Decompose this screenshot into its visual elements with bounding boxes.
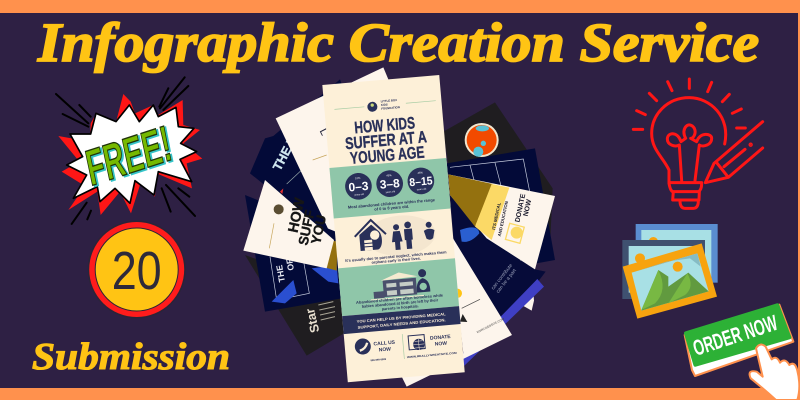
free text bbox=[81, 114, 178, 198]
card: navy the: OF bbox=[284, 258, 296, 271]
navy band text bbox=[357, 312, 447, 330]
card: cream how suffer bbox=[243, 180, 334, 268]
call us block bbox=[354, 336, 397, 363]
card: navy top left: THE W bbox=[270, 130, 302, 173]
donate block: WWW.REALLYGREATSITE.COM bbox=[407, 351, 458, 359]
age circles: 0–3 bbox=[348, 179, 369, 194]
icon: baby bbox=[423, 221, 435, 240]
base bbox=[669, 183, 702, 208]
icon: building bbox=[369, 271, 424, 300]
free text: FREE! bbox=[83, 116, 178, 198]
card: navy the: THE bbox=[274, 264, 287, 283]
infographic fan bbox=[243, 67, 555, 387]
donate block: DONATE bbox=[430, 334, 452, 342]
call us block: 999-999-9999 bbox=[371, 358, 387, 362]
navy band text: YOU CAN HELP US BY PROVIDING MEDICAL bbox=[357, 312, 447, 324]
age circles: 45% bbox=[386, 173, 392, 178]
faint map blob bbox=[364, 213, 437, 258]
cream section text: orphans early in their lives. bbox=[371, 257, 421, 265]
main heading: SUFFER AT A bbox=[344, 127, 428, 153]
call us block: CALL US bbox=[373, 340, 396, 348]
card: black start bbox=[245, 255, 344, 356]
card: gold and cream: ITS MEDICAL bbox=[491, 202, 502, 230]
card: cream lower: WWW.WEBSITE.COM bbox=[476, 317, 505, 334]
title: Infographic Creation Service bbox=[37, 12, 759, 73]
badge: 20: 20 bbox=[112, 241, 162, 301]
card: cream how suffer: YOU bbox=[308, 213, 329, 246]
donate block bbox=[405, 332, 458, 359]
card: cream top left: L bbox=[317, 127, 330, 138]
card: black start: Star bbox=[303, 307, 322, 334]
card: gold and cream: AND EDUCATION bbox=[497, 201, 509, 237]
icon: photos bbox=[622, 224, 718, 319]
free text: FREE! bbox=[81, 115, 176, 197]
main heading: YOUNG AGE bbox=[349, 143, 425, 168]
card: gold and cream bbox=[448, 174, 555, 269]
icon: mother bbox=[415, 269, 430, 293]
card: navy top left bbox=[250, 79, 345, 242]
icon: light bulb and pencil bbox=[633, 79, 763, 208]
rays bbox=[633, 79, 745, 129]
age circles: 10% bbox=[355, 176, 361, 180]
card: blue sliver bbox=[450, 351, 480, 370]
icon: couple bbox=[390, 221, 414, 250]
submission label: Submission bbox=[32, 336, 230, 378]
call us block: NOW bbox=[379, 346, 391, 353]
icon: pointing hand bbox=[750, 345, 799, 400]
card: navy with ship: can be a part bbox=[495, 267, 518, 295]
card: cream how suffer: HOW bbox=[286, 196, 309, 234]
logo: LITTLE BOX bbox=[380, 98, 397, 103]
navy band bbox=[342, 306, 461, 334]
age circles: 3–8 bbox=[379, 176, 401, 192]
age circles: years old bbox=[354, 193, 365, 197]
card: cream how suffer: SUFF bbox=[296, 209, 318, 247]
age circles bbox=[344, 167, 435, 201]
burst rays bbox=[56, 77, 195, 224]
main infographic card bbox=[322, 75, 465, 382]
white burst bbox=[67, 105, 197, 203]
age circles: years old bbox=[386, 190, 396, 194]
age circles: 45% bbox=[417, 170, 424, 175]
main heading bbox=[343, 112, 429, 168]
card: gold sliver bbox=[325, 240, 337, 271]
card: cream lower bbox=[402, 233, 512, 387]
logo: FOUNDATION bbox=[381, 105, 400, 111]
card: navy the bbox=[245, 195, 342, 312]
filament bbox=[667, 125, 712, 181]
logo bbox=[367, 98, 400, 112]
red burst bbox=[58, 94, 202, 215]
band two text bbox=[356, 293, 444, 314]
logo: KIDS bbox=[381, 102, 388, 107]
band two text: Abandoned children are often homeless while bbox=[356, 293, 443, 305]
card: cream top left bbox=[276, 67, 390, 243]
pencil bbox=[705, 122, 763, 183]
icon: house bbox=[353, 219, 387, 251]
cream section text: It's usually due to parental neglect, which makes them bbox=[345, 250, 447, 263]
bulb bbox=[652, 98, 726, 183]
button: order now bbox=[685, 305, 799, 400]
card: gold and cream: NOW bbox=[523, 199, 533, 217]
navy band text: SUPPORT, DAILY NEEDS AND EDUCATION. bbox=[358, 318, 446, 330]
badge: 20 bbox=[88, 220, 186, 318]
band two text: babies abandoned at birth are left by their bbox=[362, 298, 439, 309]
card: cream sliver bbox=[520, 260, 534, 311]
main heading: HOW KIDS bbox=[354, 113, 416, 137]
card: navy with ship bbox=[450, 193, 546, 325]
band two text: parents in hospitals. bbox=[382, 304, 419, 311]
age circles: years old bbox=[417, 187, 427, 191]
card: black with planet bbox=[443, 102, 553, 267]
card: navy with ship: can contribute bbox=[490, 263, 514, 291]
age circles: 8–15 bbox=[409, 175, 433, 189]
green band one bbox=[329, 158, 451, 219]
icon: free burst bbox=[56, 77, 202, 224]
band one text: Most abandoned children are within the range bbox=[348, 197, 436, 210]
band one text: of 0 to 8 years old. bbox=[374, 204, 409, 212]
donate block: NOW bbox=[435, 341, 448, 348]
card: gold and cream: DONATE bbox=[514, 193, 527, 223]
card: navy table bbox=[447, 148, 555, 277]
green band two bbox=[338, 258, 459, 316]
